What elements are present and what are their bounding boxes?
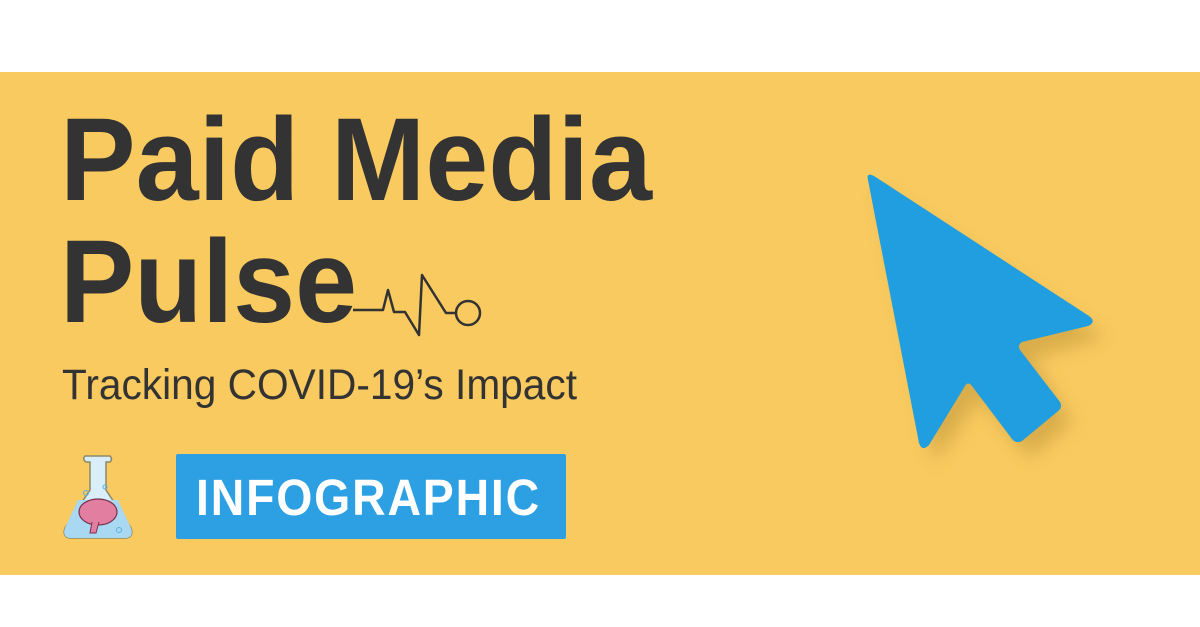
icon: cursor arrow <box>868 175 1105 463</box>
title: Pulse <box>60 216 357 348</box>
badge: INFOGRAPHIC <box>176 454 566 539</box>
icon: flask with brain <box>64 456 132 538</box>
icon: pulse line <box>353 275 480 335</box>
title: Paid Media <box>60 94 653 226</box>
subtitle: Tracking COVID-19’s Impact <box>62 361 577 409</box>
title <box>60 94 653 348</box>
badge: INFOGRAPHIC: INFOGRAPHIC <box>196 469 541 526</box>
